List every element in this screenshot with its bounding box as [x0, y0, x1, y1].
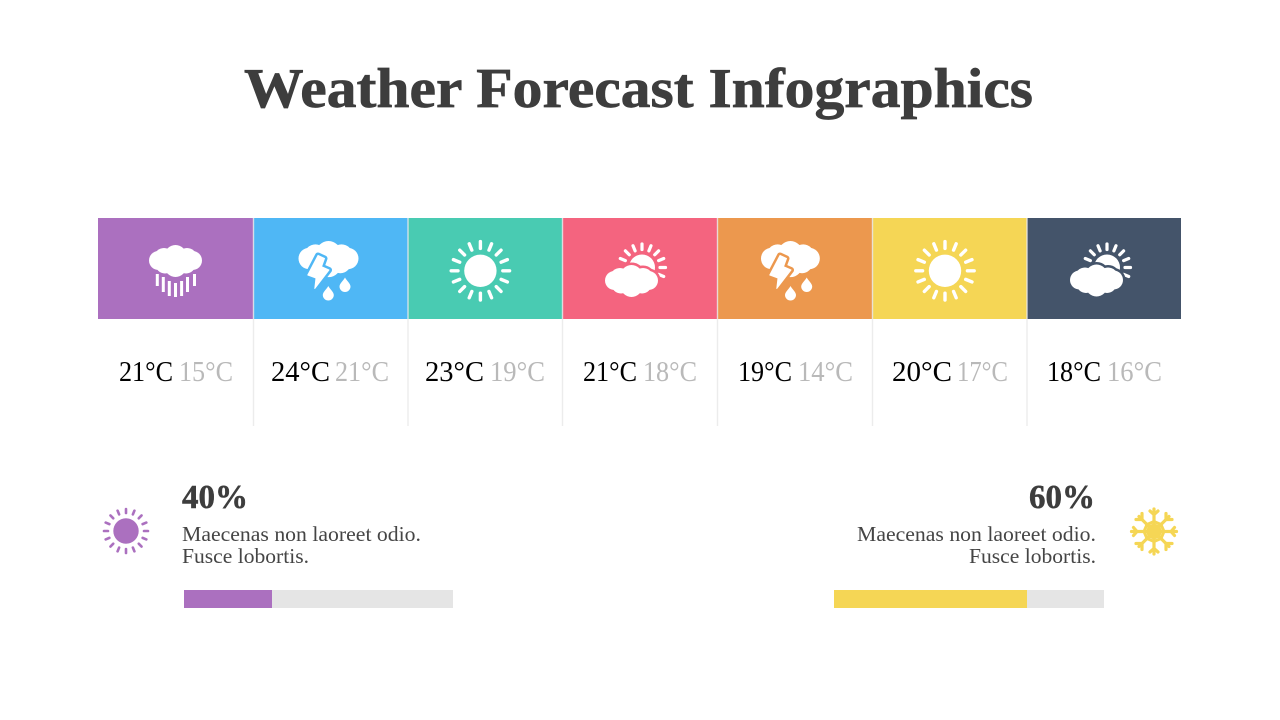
icon: purple sun [104, 509, 148, 553]
temperatures: 19°C [738, 356, 792, 388]
temperatures: 21°C [119, 356, 173, 388]
panel: 60% stat [834, 479, 1176, 608]
temperatures: 23°C [425, 356, 484, 388]
panel: day 5 storm [718, 218, 873, 319]
temperatures: 15°C [179, 356, 233, 388]
description: Maecenas non laoreet odio. [857, 522, 1096, 546]
description [182, 522, 421, 568]
progress bar [184, 590, 453, 608]
title: Weather Forecast Infographics [244, 58, 1033, 120]
temperatures: 24°C [271, 356, 330, 388]
temperatures: 18°C [1047, 356, 1101, 388]
panel: day columns dividers [254, 218, 1027, 426]
temperatures [119, 356, 1162, 388]
temperatures: 17°C [957, 356, 1008, 388]
temperatures: 21°C [335, 356, 389, 388]
panel: day 7 partly cloudy [1027, 218, 1181, 319]
temperatures: 14°C [798, 356, 853, 388]
panel: day 6 sun [872, 218, 1028, 319]
icon: storm cloud [298, 241, 358, 300]
panel: day 4 partly cloudy [562, 218, 718, 319]
icon: storm cloud [761, 241, 820, 300]
panel: day 2 storm [254, 218, 408, 319]
percent: 60% [1029, 479, 1095, 516]
temperatures: 16°C [1107, 356, 1162, 388]
progress bar [834, 590, 1104, 608]
icon: partly cloudy [1070, 244, 1130, 296]
icon: sun [916, 242, 974, 300]
description: Fusce lobortis. [969, 544, 1096, 568]
icon: sun [451, 242, 510, 300]
description: Maecenas non laoreet odio. [182, 522, 421, 546]
icon: snowflake [1132, 509, 1176, 554]
percent: 40% [182, 479, 248, 516]
icon: partly cloudy [605, 244, 666, 297]
panel: day 1 rain [98, 218, 254, 319]
icon: rain cloud [149, 245, 202, 297]
panel: 40% stat [104, 479, 453, 608]
temperatures: 21°C [583, 356, 637, 388]
description: Fusce lobortis. [182, 544, 309, 568]
temperatures: 18°C [643, 356, 697, 388]
description [857, 522, 1096, 568]
temperatures: 19°C [490, 356, 545, 388]
panel: day 3 sun [408, 218, 563, 319]
temperatures: 20°C [892, 356, 952, 388]
